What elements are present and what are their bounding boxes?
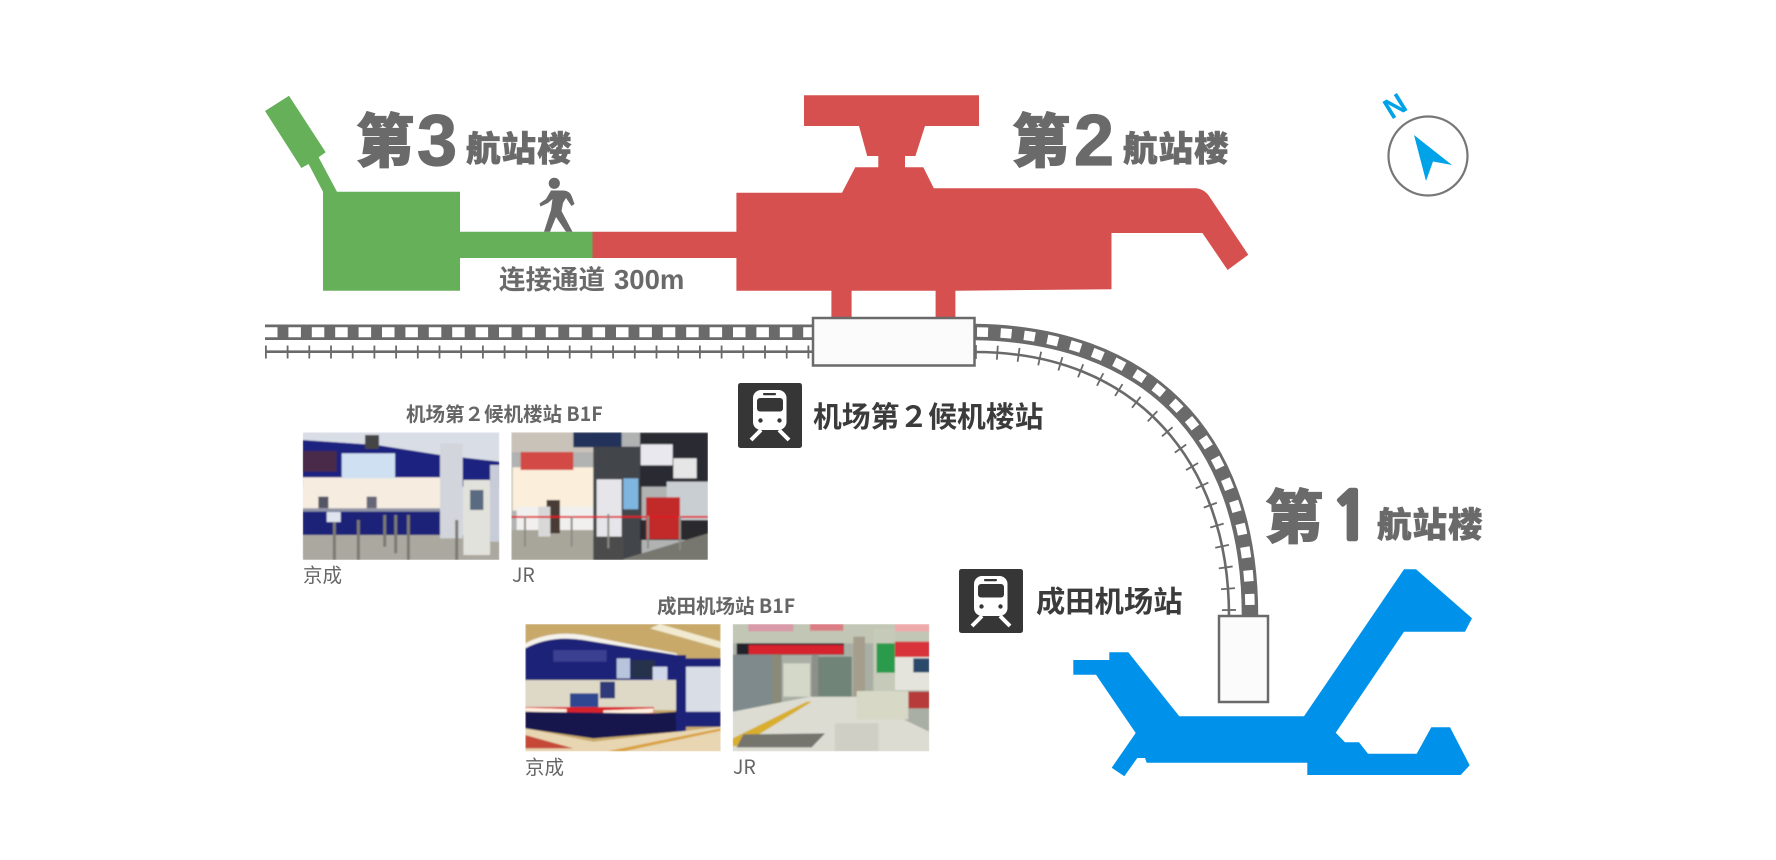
heading: terminal 2 [1012, 95, 1230, 181]
heading: terminal 1: 航站楼 [1377, 497, 1484, 547]
icon: walking person [540, 178, 574, 232]
icon: train, airport terminal 2 station [738, 383, 802, 448]
track: lower curved rail [975, 352, 1229, 616]
label: narita airport station: 成田机场站 [1036, 579, 1182, 621]
heading: terminal 2: 航站楼 [1123, 121, 1230, 171]
photo: keisei counter at terminal 2 station [302, 432, 500, 560]
caption: keisei at narita airport station: 京成 [525, 751, 564, 780]
heading: terminal 1 [1265, 471, 1484, 555]
terminal 3 building [265, 96, 592, 291]
compass dial [1388, 116, 1468, 196]
heading: terminal 3 [356, 95, 572, 181]
caption: JR at narita airport station: JR [733, 751, 756, 780]
heading: terminal 1: 1 [1331, 484, 1371, 550]
track: lower straight rail [265, 350, 812, 353]
photo: JR concourse at narita airport station [732, 624, 930, 752]
track: upper curved rail [975, 332, 1250, 616]
caption: JR at terminal 2 station: JR [512, 559, 535, 588]
compass [1378, 88, 1468, 196]
terminal 1 building [1073, 569, 1472, 776]
photo: JR counter at terminal 2 station [511, 432, 708, 560]
label: airport terminal 2 station: 机场第２候机楼站 [813, 395, 1043, 436]
heading: terminal 3: 3 [417, 101, 457, 181]
station box: airport terminal 2 [813, 318, 974, 366]
station box: narita airport [1219, 616, 1268, 702]
compass needle [1414, 135, 1452, 181]
photo: keisei counter at narita airport station [525, 624, 721, 752]
terminal 2 building [592, 95, 1248, 318]
heading: narita airport station B1F: 成田机场站 B1F [657, 590, 795, 619]
icon: train, narita airport station [959, 569, 1023, 633]
heading: terminal 1: 第 [1265, 471, 1323, 555]
track: upper straight rail [265, 324, 813, 340]
heading: terminal 2: 第 [1012, 95, 1070, 179]
heading: airport terminal 2 station B1F: 机场第２候机楼站 B1F [406, 398, 603, 427]
heading: terminal 3: 第 [356, 95, 414, 179]
compass north letter: N [1378, 88, 1413, 126]
label: connecting corridor 300m: 连接通道 300m [499, 258, 684, 297]
heading: terminal 3: 航站楼 [466, 121, 572, 171]
heading: terminal 2: 2 [1074, 101, 1114, 181]
caption: keisei at terminal 2 station: 京成 [303, 559, 342, 588]
